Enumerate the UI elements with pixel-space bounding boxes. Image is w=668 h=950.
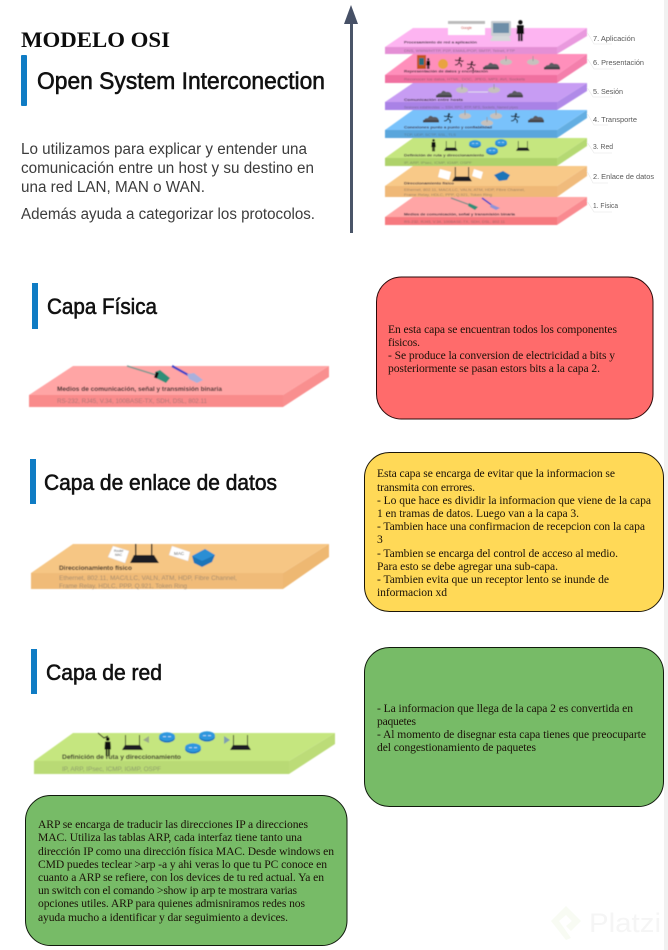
callout: Capa de enlace: Para esto se debe agregar una sub-capa. bbox=[377, 560, 558, 573]
callout: ARP: ayuda mucho a identificar y dar seguimiento a devices. bbox=[38, 911, 288, 924]
layer illustration: Capa de enlace: Direccionamiento físico bbox=[59, 565, 132, 572]
callout: Capa de red: paquetes bbox=[377, 715, 416, 728]
callout: Capa Física: - Se produce la conversion de electricidad a bits y bbox=[388, 349, 615, 362]
layer illustration: Capa de enlace: Ethernet, 802.11, MAC/LLC, VALN, ATM, HDP, Fibre Channel, bbox=[59, 575, 237, 582]
layer labels: 4. Transporte bbox=[593, 115, 637, 124]
layer illustration: Capa Física: RS-232, RJ45, V.34, 100BASE-TX, SDH, DSL, 802.11 bbox=[57, 398, 207, 405]
layer illustration: Capa de enlace: Frame Relay, HDLC, PPP, Q.921, Token Ring bbox=[59, 583, 187, 590]
layer 6: presentación: Reconocer los datos, HTML, DOC, JPEG, MP3, AVI, Sockets bbox=[404, 76, 525, 82]
callout: Capa Física: En esta capa se encuentran todos los componentes bbox=[388, 323, 617, 336]
layer 4: transporte bbox=[385, 110, 587, 138]
layer 6: presentación: Representación de datos y encriptación bbox=[404, 68, 489, 74]
layer 2: enlace de datos: Frame Relay, HDLC, PPP, Q.921, Token Ring bbox=[404, 192, 492, 197]
layer illustration: Capa de red bbox=[34, 731, 335, 774]
text block: intro: una red LAN, MAN o WAN. bbox=[21, 179, 205, 196]
watermark: Platzi: Platzi bbox=[589, 908, 661, 938]
heading: Capa de red: Capa de red bbox=[46, 660, 162, 685]
callout: Capa de enlace: - Tambien hace una confirmacion de recepcion con la capa bbox=[377, 520, 645, 533]
callout: ARP: dirección IP como una dirección física MAC. Desde windows en bbox=[38, 845, 334, 858]
watermark: Platzi bbox=[551, 906, 661, 940]
layer 4: transporte: TCP, UDP, SCTP, SSL, TLS bbox=[404, 132, 456, 137]
layer 3: red: IP, ARP, IPsec, ICMP, IGMP, OSPF bbox=[404, 160, 473, 165]
layer 7: aplicación: Google bbox=[461, 26, 472, 30]
callout: ARP: CMD puedes teclear >arp -a y ahi veras lo que tu PC conoce en bbox=[38, 858, 327, 871]
callout: Capa de enlace bbox=[364, 452, 664, 612]
layer 7: aplicación: DNS, WWW/HTTP, P2P, EMAIL/POP, SMTP, Telnet, FTP bbox=[404, 48, 515, 53]
layer 2: enlace de datos: Ethernet, 802.11, MAC/LLC, VALN, ATM, HDP, Fibre Channel, bbox=[404, 187, 525, 192]
layer labels: 3. Red bbox=[593, 142, 613, 151]
layer 4: transporte: Conexiones punto a punto y confiabilidad bbox=[404, 124, 493, 130]
layer illustration: Capa Física: Medios de comunicación, señal y transmisión binaria bbox=[57, 386, 223, 393]
layer labels: 6. Presentación bbox=[593, 58, 644, 67]
callout: Capa Física bbox=[376, 277, 653, 419]
callout: Capa de enlace: Esta capa se encarga de evitar que la informacion se bbox=[377, 467, 615, 480]
icon: router with tags: MAC bbox=[115, 553, 123, 557]
text block: intro bbox=[21, 141, 315, 223]
layer 2: enlace de datos bbox=[385, 166, 587, 197]
text block: intro: Lo utilizamos para explicar y entender una bbox=[21, 141, 307, 158]
page edge strip bbox=[664, 0, 668, 950]
icon: routers and person bbox=[98, 731, 251, 756]
callout: Capa de enlace: 1 en tramas de datos. Luego van a la capa 3. bbox=[377, 507, 579, 520]
layer labels: 5. Sesión bbox=[593, 87, 623, 96]
heading: Capa Física bbox=[32, 283, 157, 329]
callout: ARP: MAC. Utiliza las tablas ARP, cada interfaz tiene tanto una bbox=[38, 831, 302, 844]
callout: ARP: opciones utiles. ARP para quienes admisniramos redes nos bbox=[38, 897, 305, 910]
callout: Capa de enlace: - Lo que hace es dividir la informacion que viene de la capa bbox=[377, 494, 651, 507]
icon: router with tags bbox=[108, 544, 215, 567]
callout: Capa de enlace: - Tambien evita que un receptor lento se inunde de bbox=[377, 573, 609, 586]
heading: Capa de red bbox=[31, 649, 162, 694]
heading: Open System Interconection bbox=[21, 55, 325, 106]
callout: Capa de red: - Al momento de disegnar esta capa tienes que preocuparte bbox=[377, 728, 646, 741]
callout: Capa Física: posteriormente se pasan estors bits a la capa 2. bbox=[388, 362, 600, 375]
layer illustration: Capa de red: IP, ARP, IPsec, ICMP, IGMP, OSPF bbox=[62, 766, 161, 773]
text block: intro: comunicación entre un host y su destino en bbox=[21, 160, 314, 177]
layer illustration: Capa de enlace bbox=[31, 544, 329, 590]
heading: Capa Física: Capa Física bbox=[47, 294, 157, 319]
layer 7: aplicación bbox=[385, 20, 587, 54]
callout: Capa de red: - La informacion que llega de la capa 2 es convertida en bbox=[377, 702, 633, 715]
callout: Capa de red: del congestionamiento de paquetes bbox=[377, 741, 536, 754]
diagram: OSI layer stack bbox=[385, 20, 587, 225]
heading: Capa de enlace de datos: Capa de enlace de datos bbox=[44, 470, 277, 495]
callout: Capa de enlace: transmita con errores. bbox=[377, 481, 475, 494]
heading: Capa de enlace de datos bbox=[30, 459, 277, 504]
callout: Capa de enlace: 3 bbox=[377, 533, 383, 546]
layer 5: sesión: Comunicación entre hosts bbox=[404, 97, 463, 102]
icon: router with tags: MAC bbox=[174, 551, 185, 556]
layer 6: presentación bbox=[385, 54, 587, 83]
icon: router with tags: Router bbox=[114, 549, 125, 553]
title: MODELO OSI bbox=[21, 27, 170, 52]
heading: Open System Interconection: Open System Interconection bbox=[37, 68, 325, 95]
layer labels: 2. Enlace de datos bbox=[593, 172, 654, 181]
layer 1: física bbox=[385, 197, 587, 225]
callout: ARP: ARP se encarga de traducir las direcciones IP a direcciones bbox=[38, 818, 308, 831]
layer 5: sesión bbox=[385, 83, 587, 110]
callout: Capa de enlace: informacion xd bbox=[377, 586, 447, 599]
callout: Capa Física: fisicos. bbox=[388, 336, 420, 349]
callout: Capa de enlace: - Tambien se encarga del control de acceso al medio. bbox=[377, 547, 618, 560]
callout: ARP bbox=[26, 796, 347, 946]
callout: ARP: cuanto a ARP se refiere, con los devices de tu red actual. Ya en bbox=[38, 871, 324, 884]
layer 1: física: RS-232, RJ45, V.34, 100BASE-TX, SDH, DSL, 802.11 bbox=[404, 219, 505, 224]
layer 1: física: Medios de comunicación, señal y transmisión binaria bbox=[404, 212, 516, 216]
layer 7: aplicación: Procesamiento de red a aplicación bbox=[404, 40, 478, 44]
callout: Capa de red bbox=[364, 648, 664, 806]
layer 2: enlace de datos: Direccionamiento físico bbox=[404, 180, 455, 186]
layer labels: 1. Física bbox=[593, 201, 619, 210]
text block: intro: Además ayuda a categorizar los protocolos. bbox=[21, 206, 315, 223]
layer labels: 7. Aplicación bbox=[593, 34, 635, 43]
layer illustration: Capa de red: Definición de ruta y direccionamiento bbox=[62, 754, 181, 761]
layer 3: red bbox=[385, 138, 587, 166]
arrow: up the stack bbox=[344, 5, 358, 233]
layer labels bbox=[587, 32, 654, 212]
layer 3: red: Definición de ruta y direccionamiento bbox=[404, 152, 485, 158]
layer 5: sesión: Sesiones establecidas → SSH, RPC, RTP, NFS, Sockets, Named pipes bbox=[404, 104, 518, 110]
callout: ARP: un switch con el comando >show ip arp te mostrara varias bbox=[38, 884, 297, 897]
icon: network cables bbox=[127, 366, 203, 383]
layer illustration: Capa Física bbox=[29, 366, 329, 407]
